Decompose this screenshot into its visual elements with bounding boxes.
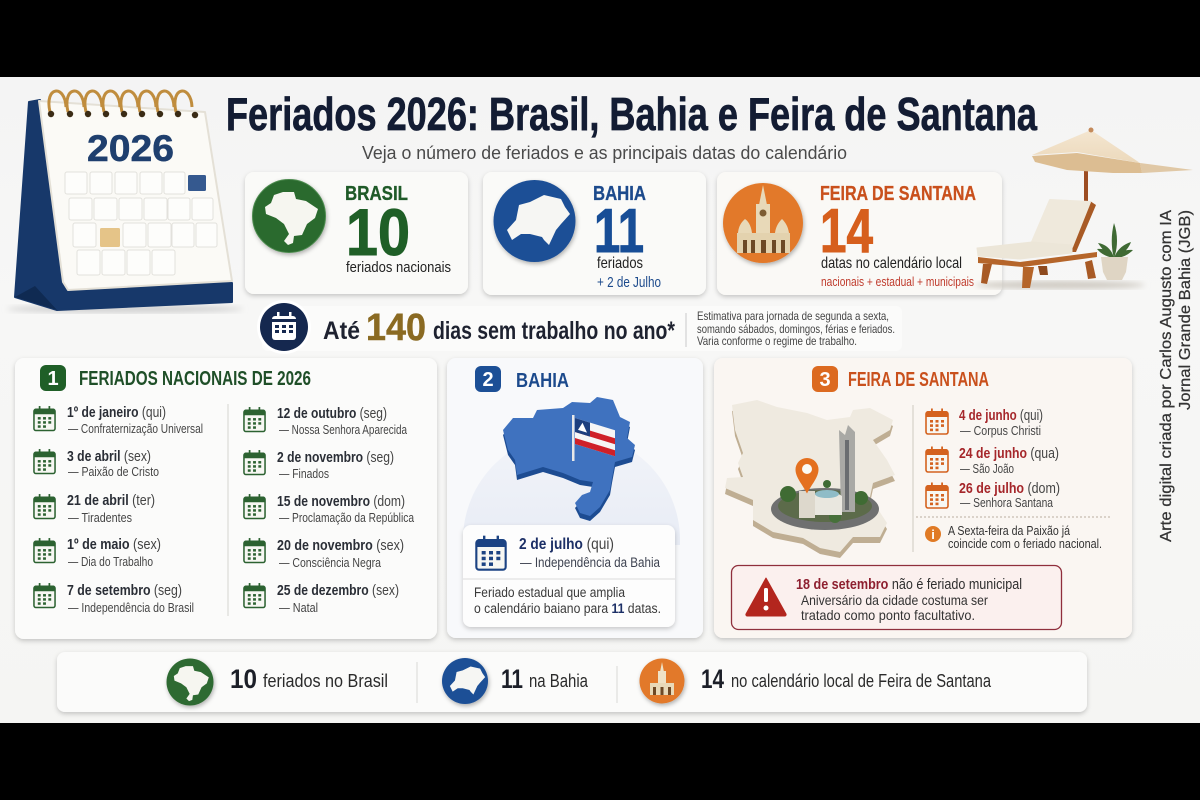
panel 3: Feira de Santana <box>714 358 1132 638</box>
info note: A Sexta-feira da Paixão já <box>948 523 1071 538</box>
panel 3 heading: FEIRA DE SANTANA <box>848 368 989 391</box>
card caption: feriados nacionais <box>346 259 451 276</box>
illustration: 3D map with city monument <box>725 400 895 558</box>
holiday: 1º de maio: — Dia do Trabalho <box>68 555 153 569</box>
alert box <box>732 566 1062 630</box>
summary: Feira de Santana: 14 <box>701 664 724 694</box>
badge 2 <box>475 366 501 392</box>
calendar year: 2026 <box>87 128 174 169</box>
badge 3 <box>812 366 838 392</box>
Bahia flag <box>575 418 615 456</box>
holiday: 12 de outubro <box>244 405 407 437</box>
holiday: 24 de junho <box>926 445 1059 476</box>
alert box: Aniversário da cidade costuma ser <box>801 592 988 608</box>
calendar spiral rings <box>48 91 198 118</box>
holiday: 12 de outubro: 12 de outubro (seg) <box>277 405 387 422</box>
banner: days off <box>257 300 902 354</box>
panel 2: Bahia <box>447 358 703 638</box>
banner headline: Até <box>323 317 360 345</box>
icon: Brazil map badge <box>252 180 326 252</box>
holiday: 3 de abril <box>34 448 159 479</box>
icon: church badge <box>723 183 803 263</box>
holiday: 24 de junho: 24 de junho (qua) <box>959 445 1059 462</box>
holiday: 25 de dezembro: — Natal <box>279 601 318 615</box>
banner note <box>697 309 895 348</box>
holiday: 1º de janeiro: 1º de janeiro (qui) <box>67 404 166 421</box>
holiday: 7 de setembro: 7 de setembro (seg) <box>67 582 182 599</box>
holiday: 26 de julho <box>926 480 1060 510</box>
watermark credit: Arte digital criada por Carlos Augusto com IA <box>1158 210 1175 542</box>
holiday: 1º de janeiro: — Confraternização Universal <box>68 422 203 436</box>
banner headline <box>323 307 675 349</box>
card note: + 2 de Julho <box>597 274 661 291</box>
summary: Brasil: 10 <box>230 664 257 694</box>
info note: coincide com o feriado nacional. <box>948 536 1102 551</box>
illustration: desk calendar 2026 <box>7 91 243 313</box>
panel 1 heading: FERIADOS NACIONAIS DE 2026 <box>79 367 311 390</box>
stat 14: 14 <box>820 197 873 266</box>
icon: Brazil badge small <box>166 658 214 706</box>
holiday: 7 de setembro <box>34 582 194 615</box>
holiday: 4 de junho <box>926 407 1043 438</box>
date card: 2 de julho: — Independência da Bahia <box>520 555 660 570</box>
icon: church badge small <box>640 658 684 704</box>
badge 1 <box>40 365 66 391</box>
banner note: Varia conforme o regime de trabalho. <box>697 334 857 348</box>
holiday: 2 de novembro: — Finados <box>279 467 329 481</box>
illustration: beach chair, umbrella and plant <box>975 128 1193 289</box>
calendar grid <box>65 172 217 275</box>
holiday: 20 de novembro <box>244 537 404 570</box>
watermark credit <box>1158 210 1194 542</box>
date card: 2 de julho: Feriado estadual que amplia <box>474 585 625 600</box>
badge 3: 3 <box>819 369 831 391</box>
holiday: 21 de abril: — Tiradentes <box>68 511 132 525</box>
illustration: 3D Bahia map with flag <box>503 397 635 521</box>
summary: Bahia: na Bahia <box>529 671 589 691</box>
holiday: 15 de novembro <box>244 493 414 525</box>
card: Brasil <box>245 172 468 294</box>
holiday: 26 de julho: 26 de julho (dom) <box>959 480 1060 497</box>
holiday: 7 de setembro: — Independência do Brasil <box>68 601 194 615</box>
summary: Feira de Santana <box>701 664 992 694</box>
card heading: FEIRA DE SANTANA <box>820 183 976 205</box>
summary: Brasil: feriados no Brasil <box>263 671 388 691</box>
panel 2 heading: BAHIA <box>516 369 569 392</box>
badge 2: 2 <box>482 369 494 391</box>
card: Bahia <box>483 172 706 295</box>
holiday: 1º de maio <box>34 536 161 569</box>
icon: warning triangle <box>746 578 786 616</box>
card: Feira de Santana <box>717 172 1002 295</box>
info note <box>925 523 1102 551</box>
card heading: BRASIL <box>345 183 408 205</box>
card caption: datas no calendário local <box>821 255 962 272</box>
date card: 2 de julho: 2 de julho (qui) <box>519 536 614 553</box>
holiday: 4 de junho: 4 de junho (qui) <box>959 407 1043 424</box>
icon: navy calendar badge <box>257 300 311 354</box>
holiday: 15 de novembro: 15 de novembro (dom) <box>277 493 405 510</box>
banner headline: dias sem trabalho no ano* <box>433 317 675 345</box>
card caption: feriados <box>597 255 643 272</box>
holiday: 24 de junho: — São João <box>960 462 1014 476</box>
summary bar <box>57 652 1087 712</box>
holiday: 1º de janeiro <box>34 404 203 436</box>
summary: Bahia <box>501 664 589 694</box>
holiday: 25 de dezembro: 25 de dezembro (sex) <box>277 582 399 599</box>
banner headline: 140 <box>366 307 426 349</box>
date card: 2 de julho <box>463 525 675 627</box>
info note: i <box>931 527 935 542</box>
summary: Brasil <box>230 664 388 694</box>
holiday: 2 de novembro: 2 de novembro (seg) <box>277 449 394 466</box>
badge 1: 1 <box>47 368 59 390</box>
holiday: 25 de dezembro <box>244 582 399 615</box>
alert box: 18 de setembro não é feriado municipal <box>796 576 1022 593</box>
icon: Bahia map badge <box>494 180 576 262</box>
holiday: 1º de maio: 1º de maio (sex) <box>67 536 161 553</box>
watermark credit: Jornal Grande Bahia (JGB) <box>1177 210 1194 410</box>
stat 11: 11 <box>594 197 644 266</box>
holiday: 26 de julho: — Senhora Santana <box>960 496 1053 510</box>
holiday: 4 de junho: — Corpus Christi <box>960 424 1041 438</box>
subtitle: Veja o número de feriados e as principais datas do calendário <box>362 143 847 163</box>
holiday: 21 de abril <box>34 492 155 525</box>
holiday: 12 de outubro: — Nossa Senhora Aparecida <box>279 423 407 437</box>
holiday: 3 de abril: — Paixão de Cristo <box>68 465 159 479</box>
date card: 2 de julho: o calendário baiano para 11 datas. <box>474 601 661 616</box>
summary: Bahia: 11 <box>501 664 523 694</box>
card heading: BAHIA <box>593 183 646 205</box>
holiday: 2 de novembro <box>244 449 394 481</box>
banner note: Estimativa para jornada de segunda a sexta, <box>697 309 889 323</box>
panel 1: national holidays <box>15 358 437 639</box>
holiday: 3 de abril: 3 de abril (sex) <box>67 448 151 465</box>
summary: Feira de Santana: no calendário local de Feira de Santana <box>731 671 992 691</box>
holiday: 20 de novembro: — Consciência Negra <box>279 556 381 570</box>
holiday: 15 de novembro: — Proclamação da República <box>279 511 414 525</box>
holiday: 20 de novembro: 20 de novembro (sex) <box>277 537 404 554</box>
holiday: 21 de abril: 21 de abril (ter) <box>67 492 155 509</box>
banner note: somando sábados, domingos, férias e feriados. <box>697 322 895 336</box>
card note: nacionais + estadual + municipais <box>821 274 974 289</box>
alert box: tratado como ponto facultativo. <box>801 607 975 623</box>
icon: Bahia badge small <box>442 658 488 704</box>
stat 10: 10 <box>346 195 410 269</box>
